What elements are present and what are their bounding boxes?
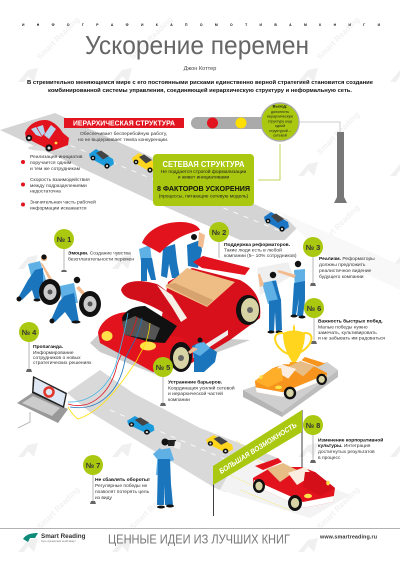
factor 4: Пропаганда. <box>33 344 64 350</box>
red hood panel <box>142 222 200 253</box>
factor 7: Регулярные победы не <box>95 483 148 489</box>
top road <box>0 113 300 240</box>
intro text: В стремительно меняющемся мире с его постоянными рисками единственно верной стратегией становится создание <box>27 79 373 86</box>
person with camera <box>153 438 181 508</box>
man left <box>258 272 282 334</box>
road sign post <box>300 122 347 203</box>
factor 1: безотлагательности перемен <box>68 256 134 262</box>
exit callout: структурой – <box>269 129 292 133</box>
watermark pattern: Smart Reading <box>128 485 174 531</box>
factor 5: № 5 <box>156 363 170 372</box>
factor 2: Такие люди есть в любой <box>224 246 282 254</box>
person left <box>139 237 156 281</box>
man with tire 2 <box>50 277 101 324</box>
arrow: exit to network <box>258 144 280 180</box>
panel: network structure: СЕТЕВАЯ СТРУКТУРА <box>162 160 245 169</box>
person right <box>187 232 205 268</box>
factor 6: и не забывать им радоваться <box>318 336 385 342</box>
watermark pattern: Smart Reading <box>315 485 361 531</box>
main car: base <box>90 333 250 375</box>
hierarchy bullets: Значительная часть рабочей <box>30 198 96 206</box>
hierarchy bullets <box>21 154 96 212</box>
yellow car bottom road <box>206 435 233 454</box>
footer rule <box>0 528 400 530</box>
factor 1: № 1 <box>57 235 71 244</box>
factor 8: достигнутых результатов <box>318 450 375 455</box>
factor 5: компании <box>168 398 190 403</box>
factor 8: в процесс <box>318 456 341 461</box>
factor 5 <box>153 357 235 406</box>
factor 3: будущего компании <box>319 274 364 280</box>
hierarchy bullets: поручается одним <box>30 161 72 166</box>
factor 4: стратегических решениях <box>33 361 92 366</box>
icon: blue car on road <box>89 149 114 169</box>
traffic light bar <box>191 117 262 129</box>
exit callout: дополнить <box>271 110 289 114</box>
factor 4: Информирование <box>33 350 74 356</box>
hierarchy bullets: информации искажается <box>30 206 87 212</box>
factor 2 <box>209 222 297 259</box>
panel: hierarchy title: ИЕРАРХИЧЕСКАЯ СТРУКТУРА <box>73 118 176 128</box>
hierarchy bullets: Скорость взаимодействия <box>30 176 90 183</box>
hierarchy bullets: недостаточна <box>30 190 61 194</box>
factor 5: Координация усилий сетевой <box>168 384 235 392</box>
factor 6: № 6 <box>307 304 321 313</box>
icon: laptop on table <box>17 376 68 428</box>
document <box>257 262 293 295</box>
car front body <box>98 312 185 372</box>
exit callout: сетевой <box>273 134 287 138</box>
factor 3 <box>303 237 375 286</box>
panel: network structure: (процессы, питающие сетевую модель) <box>159 194 249 200</box>
man with tire 1 <box>16 254 61 305</box>
people with document <box>257 261 306 334</box>
upper right pale road <box>280 212 400 290</box>
factor 6: Малые победы нужно <box>318 324 368 330</box>
exit callout: иерархическую <box>267 114 293 118</box>
hierarchy bullets: и тем же сотрудникам <box>30 167 81 172</box>
exit callout: одной <box>275 124 285 128</box>
people with tires <box>16 254 101 324</box>
rear wheel <box>236 295 260 325</box>
person middle <box>161 244 180 278</box>
factor 1: Эмоции. Создание чувства <box>68 250 131 256</box>
factor 8: культуры. Интеграция <box>318 443 371 449</box>
spoiler <box>193 256 250 275</box>
factor 2: № 2 <box>212 228 226 237</box>
factor 7: № 7 <box>86 461 100 470</box>
group: people holding hood panel <box>139 222 205 281</box>
factor 6: Важность быстрых побед. <box>318 318 383 324</box>
factor 8: № 8 <box>306 421 320 430</box>
factor 7: из виду <box>95 496 113 501</box>
factor 6 <box>304 298 385 344</box>
exit callout: структуру еще <box>268 120 292 124</box>
hierarchy description <box>78 130 168 143</box>
hierarchy description: Обеспечивает бесперебойную работу, <box>80 130 167 137</box>
footer logo: Smart Reading <box>41 533 86 540</box>
trophy <box>275 324 311 372</box>
factor 4: сотрудников о новых <box>33 356 81 361</box>
panel: network structure: и живет инициативами <box>178 176 229 180</box>
yellow speed lines <box>230 440 290 510</box>
title: Ускорение перемен <box>85 30 309 60</box>
car rear body <box>155 268 260 370</box>
headlights <box>102 331 112 341</box>
intro text: комбинированной системы управления, соединяющей иерархическую структуру и неформальную сеть. <box>48 87 352 94</box>
factor 4: № 4 <box>22 328 37 337</box>
footer slogan: ЦЕННЫЕ ИДЕИ ИЗ ЛУЧШИХ КНИГ <box>108 532 290 546</box>
orange car <box>255 357 327 399</box>
watermark pattern: Smart Reading <box>315 203 361 249</box>
watermark pattern: Smart Reading <box>315 15 361 61</box>
factor 8: Изменение корпоративной <box>318 436 383 444</box>
factor 2: Поддержка реформаторов. <box>224 241 291 248</box>
factor 2: компании (5– 10% сотрудников) <box>224 253 297 259</box>
icon: blue car on road right <box>264 212 289 232</box>
factor 3: № 3 <box>306 243 320 252</box>
watermark pattern: Smart Reading <box>35 485 81 531</box>
finish banner: БОЛЬШАЯ ВОЗМОЖНОСТЬ <box>217 420 298 476</box>
factor 3: реалистичное видение <box>319 269 372 274</box>
factor 7 <box>83 455 150 504</box>
exit callout <box>261 103 299 141</box>
open hood <box>121 281 185 323</box>
red convertible <box>253 458 335 511</box>
man right <box>277 261 306 318</box>
hierarchy description: но не выдерживает темпа конкуренции. <box>78 138 168 143</box>
footer url: www.smartreading.ru <box>319 534 377 540</box>
bottom road <box>67 370 278 492</box>
side sill <box>193 330 228 358</box>
wires to laptop <box>68 313 150 419</box>
tan cargo bed <box>165 268 235 307</box>
factor 3: Реализм. Реформаторы <box>319 256 375 262</box>
factor 7: позволят потерять цель <box>95 490 150 495</box>
factor 7: Не сбавлять обороты! <box>95 476 150 483</box>
factor 4 <box>19 322 92 372</box>
panel: network structure: 8 ФАКТОРОВ УСКОРЕНИЯ <box>157 184 250 193</box>
panel: network structure: Не поддается строгой формализации <box>161 168 246 175</box>
panel: network structure <box>153 154 254 206</box>
factor 6: замечать, культивировать <box>318 331 377 336</box>
factor 8 <box>303 415 383 463</box>
main red car <box>98 256 260 372</box>
person crouching at wheel <box>188 338 217 372</box>
road glow to finish <box>220 452 350 518</box>
watermark pattern: Smart Reading <box>315 110 361 156</box>
exit callout: Выход: <box>273 104 287 108</box>
factor 3: должны предложить <box>319 263 366 268</box>
intro text <box>27 79 373 94</box>
header label: И Н Ф О Г Р А Ф И К А П О М О Т И В А М К Н И Г И <box>22 23 381 27</box>
hierarchy bullets: между подразделениями <box>30 184 87 189</box>
footer logo: Суть лучших книг за 20 минут <box>41 540 76 543</box>
finish banner <box>213 410 302 516</box>
icon: red car <box>25 120 69 152</box>
hierarchy bullets: Реализация инициатив <box>30 154 83 160</box>
front wheel <box>170 342 192 372</box>
blue car bottom road <box>127 416 155 435</box>
watermark pattern: Smart Reading <box>35 15 81 61</box>
orange car pedestal <box>243 362 338 417</box>
footer logo <box>23 533 86 543</box>
factor 1 <box>54 229 134 272</box>
engine bay <box>122 306 177 343</box>
icon: yellow car on road <box>132 153 157 173</box>
factor 5: и иерархической частей <box>168 390 223 397</box>
factor 5: Устранение барьеров. <box>168 378 223 386</box>
watermark pattern: Smart Reading <box>128 15 174 61</box>
author: Джон Коттер <box>184 66 216 72</box>
